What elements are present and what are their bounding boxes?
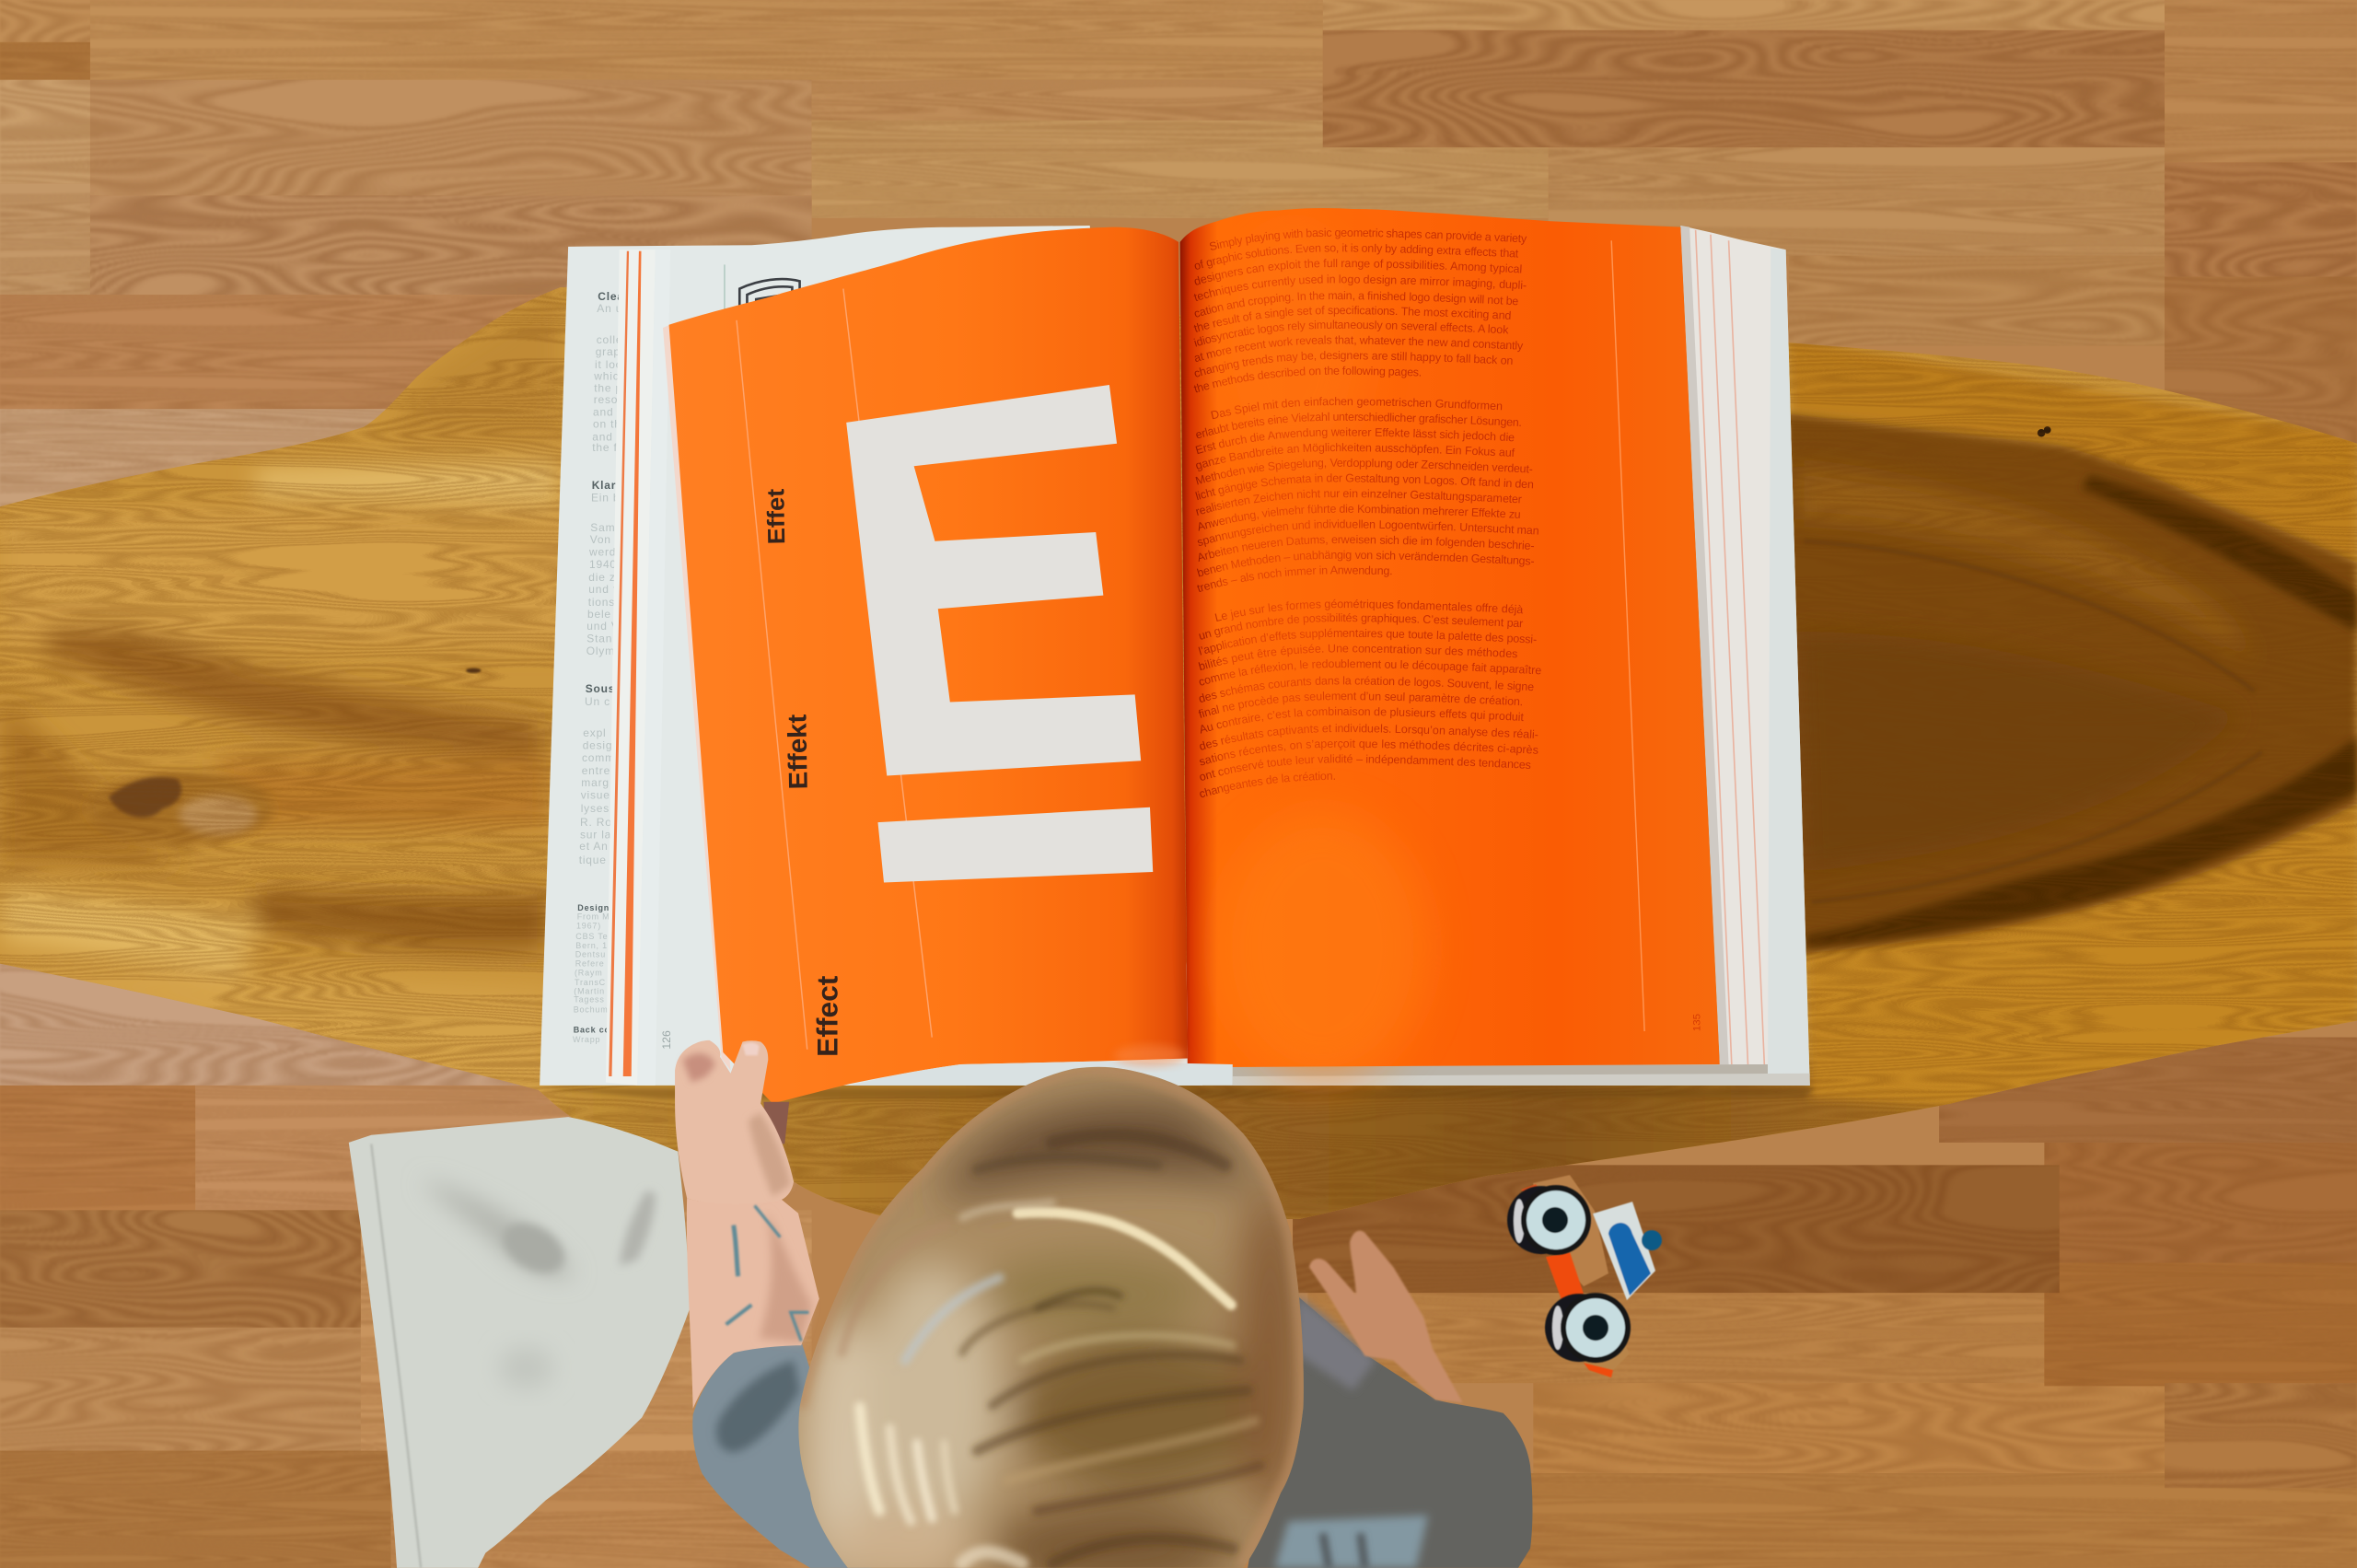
book: small cut-off text columns: expl: [583, 726, 607, 739]
book: small cut-off text columns: comm: [582, 751, 615, 764]
book: small cut-off text columns: visue: [581, 788, 610, 801]
book: small cut-off text columns: TransC: [575, 978, 606, 987]
paragraph: English: cation and cropping. In the main, a finished logo design will not be: [1195, 291, 1518, 317]
label: Effet: Effet: [761, 488, 790, 545]
paragraph: German: Arbeiten neueren Datums, erweisen sich die im folgenden beschrie-: [1196, 533, 1535, 564]
open book: [540, 208, 1816, 1103]
book: small cut-off text columns: Refere: [575, 958, 605, 968]
book: small cut-off text columns: tions: [588, 596, 615, 609]
book: small cut-off text columns: From M: [577, 912, 610, 921]
child: left arm and hand holding the page: [675, 1040, 819, 1409]
book: small cut-off text columns: desig: [583, 738, 612, 751]
book: small cut-off text columns: Dentsu: [575, 949, 606, 958]
child from above: [675, 1038, 1532, 1568]
book: right orange page: [1180, 208, 1720, 1083]
child: grey t-shirt: [692, 1295, 1532, 1568]
book: small cut-off text columns: Sam: [590, 521, 615, 534]
book: small cut-off text columns: Back co: [574, 1026, 610, 1035]
book: small cut-off text columns: sur la: [580, 828, 611, 841]
paragraph: German: Methoden wie Spiegelung, Verdopplung oder Zerschneiden verdeut-: [1194, 457, 1533, 488]
book: right page stack: [1233, 226, 1810, 1086]
book: small cut-off text columns: colle: [597, 333, 622, 346]
paragraph: English: the result of a single set of specifications. The most exciting and: [1193, 306, 1511, 332]
table: dark wood whorl: [1786, 413, 2357, 962]
book: small cut-off text columns: Un c: [585, 695, 610, 708]
paragraph: German: licht gängige Schemata in der Gestaltung von Logos. Oft fand in den: [1194, 471, 1534, 503]
book: small cut-off text columns: werd: [588, 545, 616, 558]
book: green guide line: [724, 264, 726, 323]
paragraph: English: of graphic solutions. Even so, it is only by adding extra effects that: [1195, 243, 1518, 270]
book: small cut-off text columns: Bern, 1: [575, 941, 608, 950]
paragraph: French: [1197, 598, 1542, 801]
book: page number 126: 126: [660, 1030, 673, 1050]
book: small cut-off text columns: Tagess: [574, 995, 605, 1005]
paragraph: German: spannungsreichen und individuellen Logoentwürfen. Untersucht man: [1196, 517, 1539, 549]
paragraph: English: changing trends may be, designers are still happy to fall back on: [1192, 349, 1514, 380]
book: small cut-off text columns: marg: [581, 776, 610, 789]
toy: white cab with blue window: [1593, 1202, 1662, 1300]
paragraph: German: benen Methoden – unabhängig von sich verändernden Gestaltungs-: [1196, 549, 1535, 580]
page number 135: 135: [1692, 1014, 1703, 1031]
paragraph: English: techniques currently used in logo design are mirror imaging, dupli-: [1193, 274, 1527, 301]
paragraph: French: ont conservé toute leur validité – indépendamment des tendances: [1198, 752, 1531, 784]
book: small cut-off text columns: entre: [582, 764, 610, 777]
table: light rim on right: [1789, 338, 2357, 1107]
book: small cut-off text columns: Wrapp: [573, 1035, 600, 1044]
book: small cut-off text columns: und f: [588, 583, 617, 596]
paragraph: English: the methods described on the following pages.: [1192, 365, 1422, 396]
book: small cut-off text columns: whic: [593, 370, 620, 383]
paragraph: French: Le jeu sur les formes géométriques fondamentales offre déjà: [1213, 598, 1524, 624]
book: small cut-off text columns: 1940: [589, 558, 617, 571]
table: knot: [87, 772, 273, 845]
paragraph: English: [1192, 226, 1527, 396]
book: small cut-off text columns: (Raym: [575, 968, 603, 977]
paragraph: German: erlaubt bereits eine Vielzahl unterschiedlicher grafischer Lösungen.: [1194, 411, 1522, 442]
book: small cut-off text columns: tique: [579, 854, 607, 866]
paragraph: German: Das Spiel mit den einfachen geometrischen Grundformen: [1210, 395, 1503, 422]
paragraph: English: idiosyncratic logos rely simultaneously on several effects. A look: [1193, 320, 1508, 346]
book: small cut-off text columns: and a: [592, 430, 623, 443]
paragraph: English: Simply playing with basic geometric shapes can provide a variety: [1210, 228, 1527, 250]
book: small cut-off text columns: et An: [579, 840, 609, 853]
book: folded white flaps with orange edges: [606, 250, 670, 1086]
book: underlying left page with cut-off text: [540, 226, 1202, 1086]
paragraph: English: designers can exploit the full range of possibilities. Among typical: [1195, 259, 1522, 285]
book: small cut-off text columns: CBS Te: [575, 932, 608, 941]
book: small cut-off text columns: on th: [593, 417, 621, 430]
paragraph: German: Erst durch die Anwendung weiterer Effekte lässt sich jedoch die: [1194, 425, 1515, 457]
book: small cut-off text columns: Von g: [590, 533, 621, 546]
toy: red axle: [1521, 1184, 1613, 1377]
left sleeve: [692, 1341, 872, 1568]
folded linen towel: [349, 1117, 690, 1568]
book: small cut-off text columns: Clea: [598, 290, 624, 303]
vertical bar below E: [877, 807, 1153, 882]
book: small cut-off text columns: grap: [596, 345, 621, 358]
book: left orange page: [663, 227, 1188, 1103]
book: small cut-off text columns: the p: [594, 382, 622, 395]
toy: rear wheel: [1507, 1185, 1591, 1255]
book: small cut-off text columns: Olym: [586, 645, 615, 657]
paragraph: German: Anwendung, vielmehr führte die Kombination mehrerer Effekte zu: [1196, 503, 1521, 534]
paragraph: German: [1194, 395, 1539, 595]
child: right hand on floor: [1309, 1231, 1463, 1402]
guide line on right page: [1611, 240, 1644, 1031]
book: small cut-off text columns: lyses: [581, 802, 610, 815]
paragraph: English: at more recent work reveals that, whatever the new and constantly: [1195, 335, 1523, 362]
book: small cut-off text columns: the f: [592, 441, 618, 454]
paragraph: German: ganze Bandbreite an Möglichkeiten ausschöpfen. Ein Fokus auf: [1194, 441, 1515, 472]
paragraph: German: realisierten Zeichen nicht nur ein einzelner Gestaltungsparameter: [1194, 487, 1522, 518]
guide lines on left page: [737, 289, 932, 1050]
paragraph: French: bilités peut être épuisée. Une concentration sur des méthodes: [1197, 642, 1518, 673]
book: small cut-off text columns: [573, 290, 624, 1044]
book: partial logo on left page: [739, 279, 800, 308]
book: small cut-off text columns: R. Ro: [580, 816, 612, 829]
book: small cut-off text columns: reso: [594, 393, 618, 406]
right shoulder and sleeve: [1248, 1295, 1532, 1568]
book: small cut-off text columns: Design: [577, 903, 610, 912]
book: small cut-off text columns: Klar: [592, 479, 616, 492]
paragraph: French: final ne procède pas seulement d’un seul paramètre de création.: [1197, 690, 1524, 721]
book: bottom page edge: [849, 1062, 1233, 1086]
book: shadow: [541, 1088, 1816, 1099]
paragraph: French: comme la réflexion, le redoublement ou le découpage fait apparaître: [1197, 657, 1542, 689]
toy car: [1507, 1175, 1662, 1377]
paragraph: French: l’application d’effets supplémentaires que toute la palette des possi-: [1197, 627, 1538, 658]
toy: front wheel: [1545, 1293, 1631, 1363]
child: hair wisps over the book: [1114, 1045, 1186, 1066]
label: Effekt: Effekt: [783, 714, 814, 790]
book: small cut-off text columns: Bochum: [574, 1005, 609, 1014]
paragraph: French: sations récentes, on s’aperçoit que les méthodes décrites ci-après: [1198, 738, 1538, 769]
book: small cut-off text columns: die z: [588, 571, 616, 584]
child: blond hair: [798, 1066, 1304, 1568]
book: small cut-off text columns: und V: [586, 620, 620, 633]
book: small cut-off text columns: Sous: [586, 682, 615, 695]
body text in three languages: [1192, 226, 1542, 801]
book: small cut-off text columns: An u: [597, 302, 622, 315]
label: Effect: Effect: [811, 976, 843, 1057]
table: live-edge wooden slab: [0, 287, 2357, 1219]
book: small cut-off text columns: it loo: [595, 358, 622, 371]
toy: wooden body: [1533, 1175, 1630, 1376]
book: small cut-off text columns: and l: [593, 405, 621, 418]
paragraph: German: trends – als noch immer in Anwendung.: [1196, 563, 1393, 595]
large letter E: [846, 385, 1153, 882]
book: small cut-off text columns: Ein b: [591, 492, 620, 505]
paragraph: French: des schémas courants dans la création de logos. Souvent, le signe: [1197, 674, 1535, 705]
paragraph: French: changeantes de la création.: [1198, 770, 1336, 801]
book: small cut-off text columns: Stan: [586, 632, 612, 645]
paragraph: French: un grand nombre de possibilités graphiques. C’est seulement par: [1197, 611, 1524, 643]
book: small cut-off text columns: (Martin: [574, 986, 605, 995]
book: small cut-off text columns: bele: [587, 608, 611, 621]
paragraph: French: des résultats captivants et individuels. Lorsqu’on analyse des réali-: [1198, 722, 1538, 753]
paragraph: French: Au contraire, c’est la combinaison de plusieurs effets qui produit: [1198, 705, 1525, 737]
book: small cut-off text columns: 1967): [576, 921, 601, 930]
